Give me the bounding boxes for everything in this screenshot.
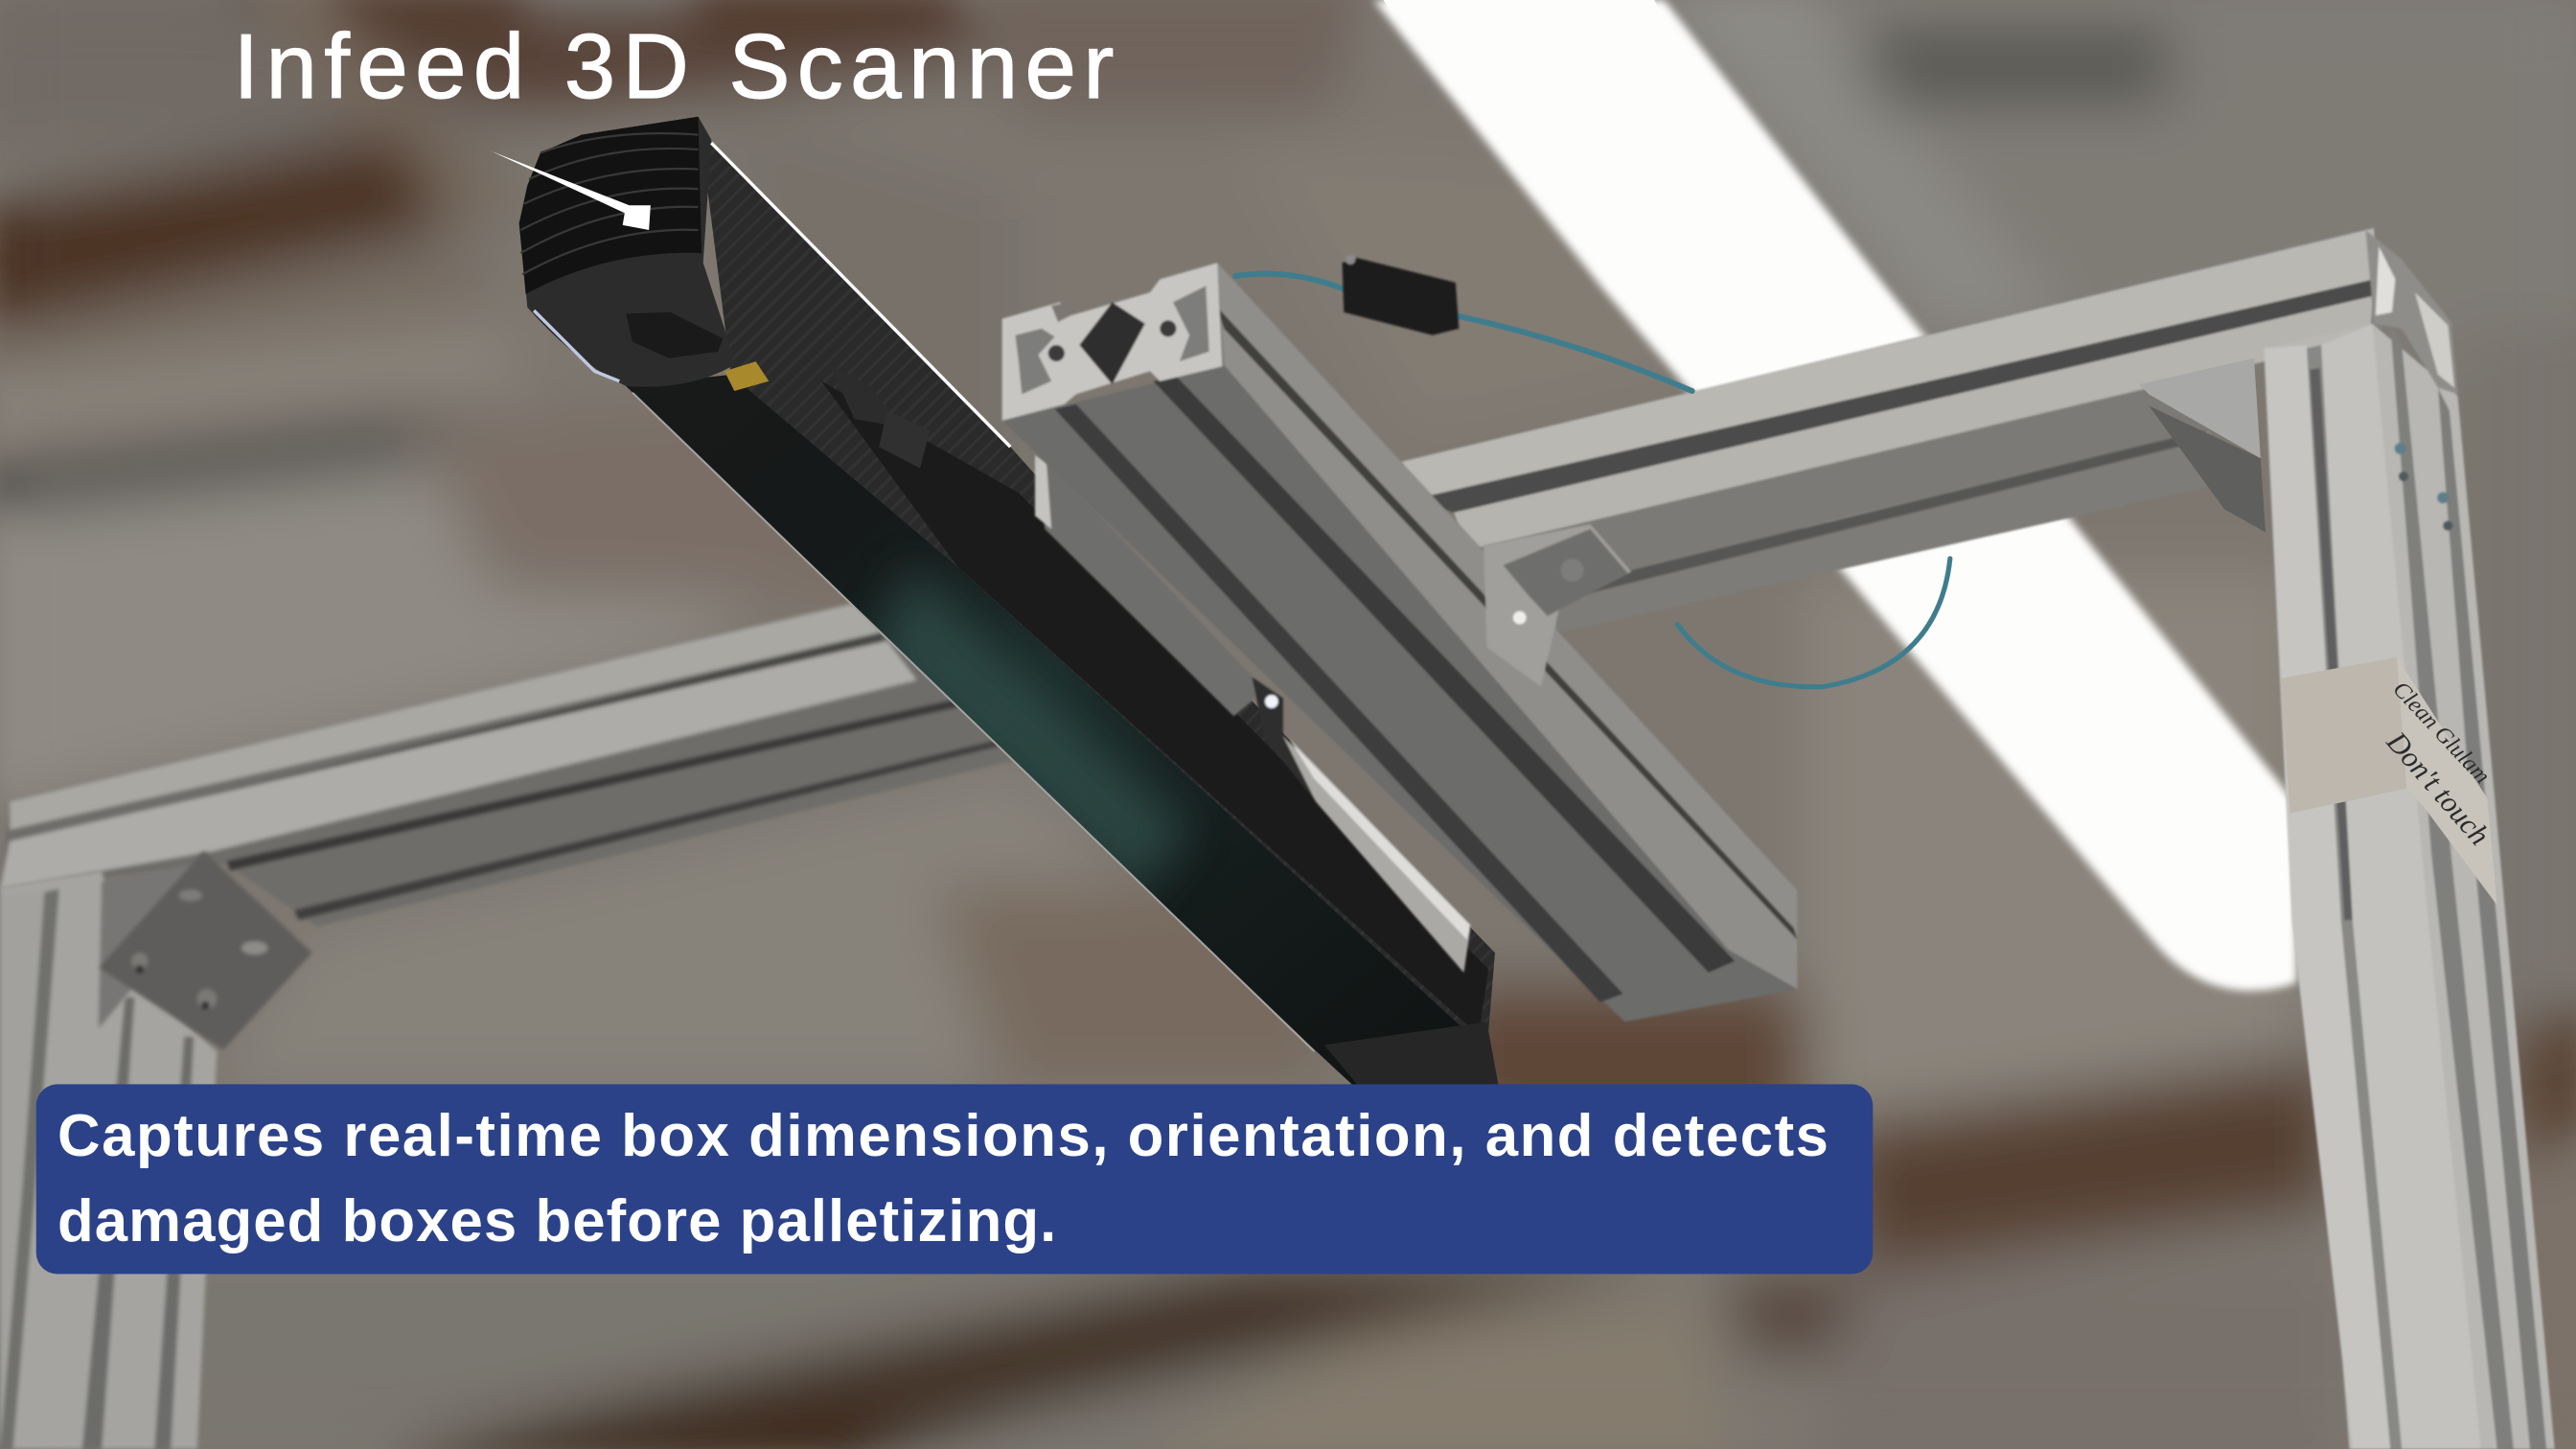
masking tape label	[2280, 657, 2497, 906]
masking tape label: Clean Glulam	[2388, 677, 2495, 789]
title: Infeed 3D Scanner	[233, 15, 1114, 118]
scanner teal reflection	[871, 566, 1191, 895]
extrusion groove upper	[1217, 308, 1797, 940]
laser warning label	[724, 361, 769, 391]
scanner dark ribbed band	[821, 365, 1488, 1035]
description text: damaged boxes before palletizing.	[58, 1188, 1056, 1254]
extrusion groove mid	[1153, 377, 1735, 973]
scanner lower edge highlight	[632, 393, 1314, 1051]
blue cable	[1235, 274, 1950, 687]
scanner glossy face	[626, 375, 1495, 1088]
scanner head window	[626, 312, 723, 358]
scanner head cooling ribs	[519, 117, 702, 294]
description text: Captures real-time box dimensions, orientation, and detects	[58, 1103, 1828, 1169]
mounting plate	[1035, 455, 1470, 973]
cable connector	[1343, 255, 1459, 335]
left vertical post	[0, 871, 217, 1449]
scanner ribbed side	[699, 117, 1495, 1051]
description panel	[36, 1084, 1873, 1274]
infeed 3D scanner device	[519, 117, 1498, 1088]
pointer arrow	[492, 151, 651, 230]
masking tape label: Don't touch	[2380, 724, 2496, 852]
extrusion groove lower	[1055, 404, 1623, 1002]
extrusion end face	[1002, 263, 1222, 421]
scanner head blue edge	[534, 310, 619, 381]
ceiling light	[1373, 0, 2297, 991]
scanner end block	[1324, 1022, 1498, 1084]
right horizontal beam	[1396, 227, 2382, 632]
right corner gusset	[2139, 358, 2266, 532]
left corner bracket	[99, 851, 312, 1049]
corner bracket on extrusion	[1484, 524, 1631, 687]
extrusion light side	[1217, 263, 1797, 989]
right vertical post with end profile	[2264, 230, 2555, 1449]
left horizontal beam	[0, 601, 1026, 927]
aluminium extrusion	[1002, 263, 1797, 1022]
linear rail	[1252, 677, 1470, 973]
scanner bright top edge	[711, 143, 1010, 447]
scanner head	[519, 117, 734, 387]
